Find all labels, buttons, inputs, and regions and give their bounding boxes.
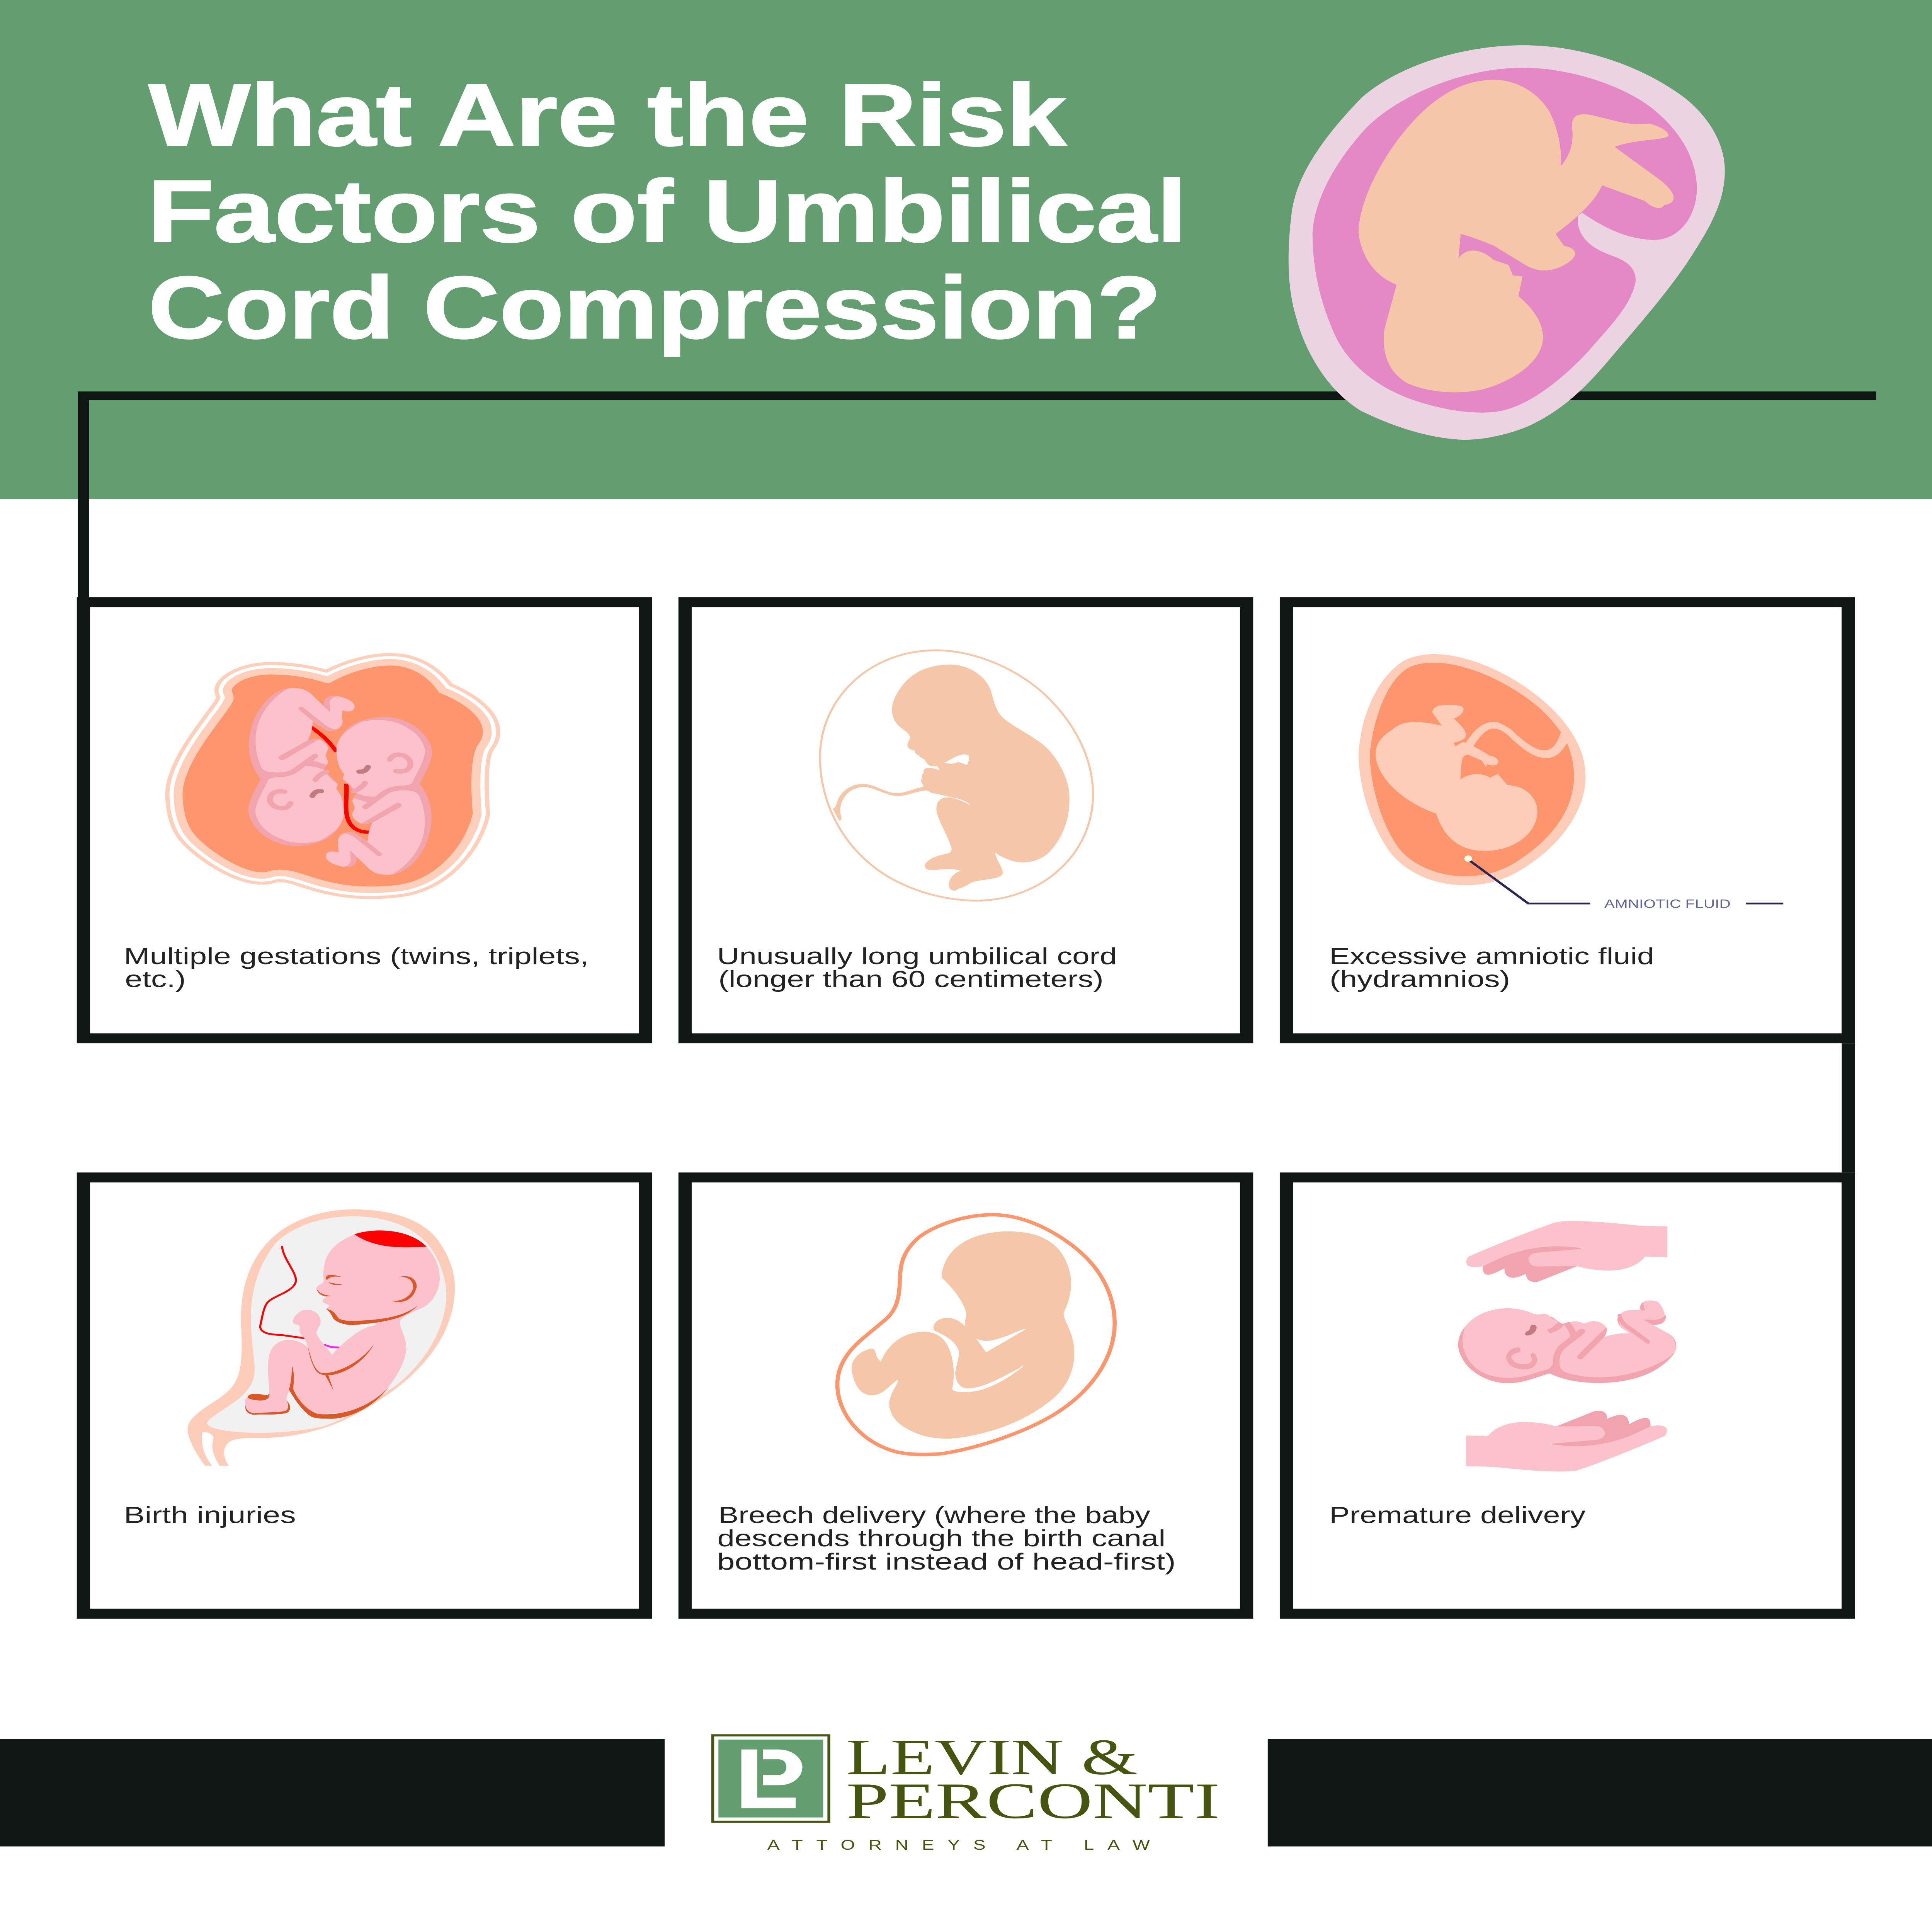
logo wordmark bbox=[846, 1728, 1220, 1829]
panel: multiple gestations bbox=[83, 602, 646, 1038]
icon: baby with head injury in womb bbox=[187, 1209, 455, 1466]
title: What Are the Risk bbox=[149, 66, 1067, 164]
text: excessive amniotic fluid: (hydramnios) bbox=[1330, 966, 1510, 992]
footer bar right bbox=[1268, 1739, 1932, 1847]
logo wordmark: LEVIN & bbox=[846, 1728, 1138, 1785]
panel: excessive amniotic fluid bbox=[1286, 602, 1848, 1038]
logo tagline: ATTORNEYS AT LAW bbox=[767, 1837, 1150, 1852]
title: Cord Compression? bbox=[148, 258, 1161, 357]
panel: birth injuries bbox=[83, 1177, 646, 1614]
text: long umbilical cord: Unusually long umbilical cord bbox=[717, 943, 1117, 969]
text: excessive amniotic fluid: Excessive amniotic fluid bbox=[1329, 943, 1654, 969]
icon: fetus with long cord bbox=[820, 650, 1093, 901]
text: multiple gestations: etc.) bbox=[125, 966, 186, 992]
text: breech delivery bbox=[717, 1502, 1176, 1575]
panel: breech delivery bbox=[685, 1177, 1247, 1614]
text: breech delivery: descends through the birth canal bbox=[718, 1525, 1165, 1551]
panel: premature delivery bbox=[1286, 1177, 1848, 1614]
icon: fetus in womb hero illustration bbox=[1289, 45, 1725, 440]
logo: Levin & Perconti bbox=[713, 1728, 1220, 1852]
label: amniotic fluid: AMNIOTIC FLUID bbox=[1604, 897, 1731, 910]
footer bar left bbox=[0, 1739, 665, 1847]
icon: twins in womb bbox=[178, 662, 487, 890]
connector line from header to first panel bbox=[83, 396, 1876, 600]
logo wordmark: PERCONTI bbox=[846, 1772, 1220, 1829]
text: long umbilical cord bbox=[717, 943, 1117, 992]
title: Factors of Umbilical bbox=[148, 162, 1187, 260]
text: excessive amniotic fluid bbox=[1329, 943, 1654, 992]
header band bbox=[0, 0, 1932, 499]
text: breech delivery: Breech delivery (where the baby bbox=[718, 1502, 1150, 1528]
text: breech delivery: bottom-first instead of head-first) bbox=[717, 1549, 1176, 1575]
text: multiple gestations bbox=[124, 943, 588, 992]
logo mark bbox=[713, 1735, 829, 1822]
connector between third and sixth panels bbox=[1842, 1043, 1855, 1172]
text: premature delivery: Premature delivery bbox=[1329, 1502, 1586, 1528]
text: multiple gestations: Multiple gestations (twins, triplets, bbox=[124, 943, 588, 969]
icon: fetus surrounded by amniotic fluid bbox=[1359, 654, 1783, 903]
text: birth injuries: Birth injuries bbox=[124, 1502, 296, 1528]
title bbox=[148, 66, 1187, 357]
icon: hands protecting premature baby bbox=[1458, 1221, 1676, 1471]
icon: breech fetus bbox=[837, 1215, 1115, 1454]
text: long umbilical cord: (longer than 60 centimeters) bbox=[718, 966, 1104, 992]
panel: long umbilical cord bbox=[685, 602, 1247, 1038]
